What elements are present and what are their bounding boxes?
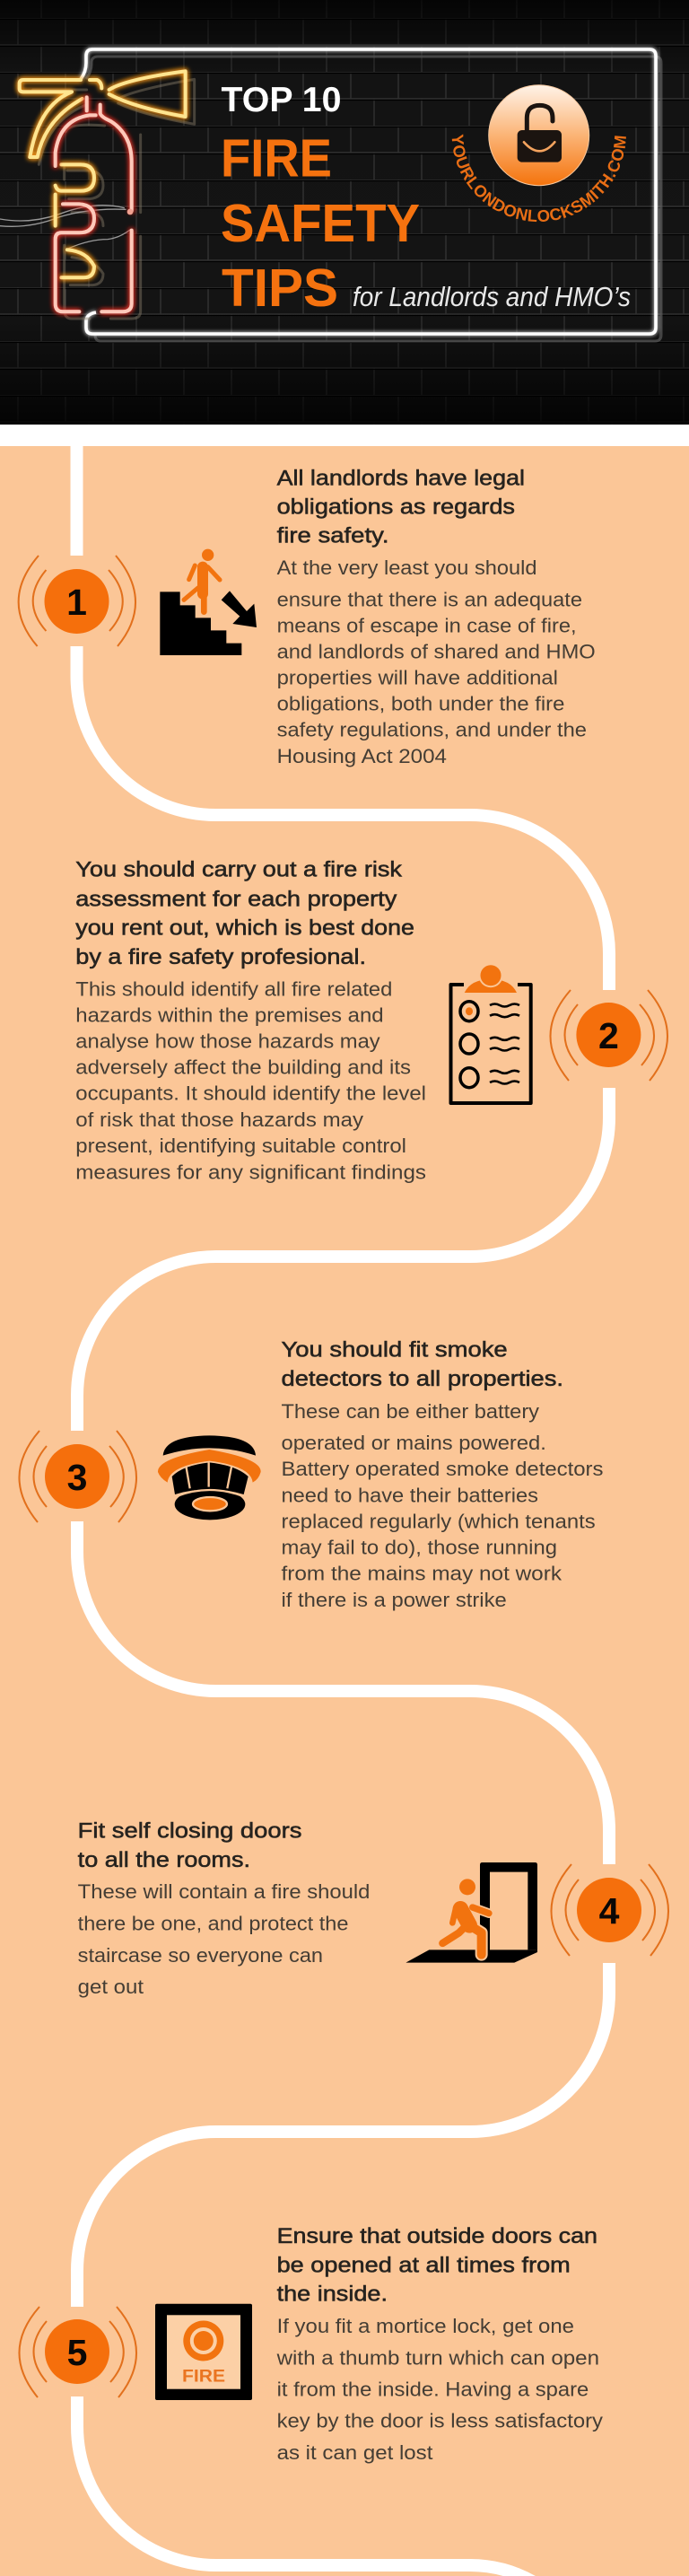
tip 2 heading: You should carry out a fire risk bbox=[75, 858, 403, 882]
tip 1 body: Housing Act 2004 bbox=[277, 745, 447, 767]
tip 3 bbox=[19, 1338, 603, 1611]
tip 3 heading: detectors to all properties. bbox=[282, 1367, 563, 1391]
number badge 4 bbox=[551, 1864, 668, 1963]
icon: checklist clipboard bbox=[450, 963, 531, 1103]
tip 2 body: This should identify all fire related bbox=[75, 977, 392, 1000]
tip 2 body: analyse how those hazards may bbox=[75, 1030, 380, 1052]
number badge 4: 4 bbox=[599, 1890, 620, 1932]
tip 3 body: from the mains may not work bbox=[282, 1563, 563, 1585]
subtitle: for Landlords and HMO’s bbox=[353, 281, 631, 312]
number badge 2 bbox=[550, 990, 667, 1088]
white band under header bbox=[0, 425, 689, 446]
tip 1 body: obligations, both under the fire bbox=[277, 693, 564, 715]
number badge 2: 2 bbox=[598, 1015, 619, 1056]
tip 2 body: of risk that those hazards may bbox=[75, 1108, 364, 1131]
icon: smoke detector bbox=[158, 1435, 261, 1520]
tip 5 body bbox=[276, 2315, 604, 2464]
tip 5 bbox=[19, 2224, 604, 2464]
icon: person leaving door bbox=[406, 1862, 537, 1963]
icon: smiling padlock bbox=[518, 105, 562, 162]
tip 1 body: ensure that there is an adequate bbox=[277, 588, 582, 610]
logo: yourlondonlocksmith bbox=[452, 84, 626, 223]
tip 3 body bbox=[282, 1400, 603, 1611]
tip 2 body: present, identifying suitable control bbox=[75, 1135, 406, 1157]
tip 5 heading: be opened at all times from bbox=[277, 2253, 571, 2277]
tip 3 body: These can be either battery bbox=[282, 1400, 540, 1423]
tip 3 heading bbox=[282, 1338, 563, 1391]
tip 4 bbox=[78, 1818, 668, 1998]
title: top 10: TOP 10 bbox=[221, 81, 341, 119]
tip 4 heading bbox=[78, 1818, 301, 1872]
title: safety: SAFETY bbox=[221, 194, 420, 253]
tip 2 body bbox=[75, 977, 426, 1183]
tip 5 body: If you fit a mortice lock, get one bbox=[277, 2315, 574, 2337]
tip 3 body: operated or mains powered. bbox=[282, 1432, 546, 1454]
header panel: neon brick wall bbox=[0, 0, 689, 425]
tip 2 body: adversely affect the building and its bbox=[75, 1056, 411, 1079]
title: tips: TIPS bbox=[222, 258, 338, 318]
tip 3 body: may fail to do), those running bbox=[282, 1537, 557, 1559]
tip 1 body: properties will have additional bbox=[277, 667, 558, 689]
white winding path bbox=[77, 431, 609, 2576]
tip 5 heading bbox=[277, 2224, 597, 2306]
tip 1 heading: obligations as regards bbox=[277, 495, 515, 520]
tip 1 heading: All landlords have legal bbox=[277, 467, 525, 491]
title: fire: FIRE bbox=[221, 129, 332, 188]
tip 4 body: staircase so everyone can bbox=[78, 1944, 323, 1967]
tip 2 bbox=[75, 858, 667, 1183]
number badge 3 bbox=[19, 1431, 136, 1522]
tip 4 body: get out bbox=[78, 1976, 144, 1998]
number badge 1 bbox=[19, 556, 135, 646]
tip 2 heading: by a fire safety profesional. bbox=[75, 945, 366, 969]
tip 5 heading: Ensure that outside doors can bbox=[277, 2224, 597, 2248]
tip 5 heading: the inside. bbox=[277, 2282, 388, 2306]
tip 5 body: with a thumb turn which can open bbox=[276, 2346, 599, 2369]
tip 2 body: measures for any significant findings bbox=[75, 1161, 426, 1183]
tip 4 body bbox=[78, 1880, 370, 1998]
tip 4 heading: Fit self closing doors bbox=[78, 1818, 301, 1843]
tip 1 body: safety regulations, and under the bbox=[277, 719, 587, 741]
tip 1 heading bbox=[277, 467, 525, 548]
tip 1 body: and landlords of shared and HMO bbox=[277, 640, 596, 662]
tip 3 body: replaced regularly (which tenants bbox=[282, 1510, 596, 1532]
tip 1 bbox=[19, 467, 596, 767]
tip 2 heading bbox=[75, 858, 414, 969]
tip 5 body: it from the inside. Having a spare bbox=[277, 2378, 589, 2400]
icon: fire call box bbox=[155, 2304, 252, 2400]
number badge 3: 3 bbox=[67, 1457, 87, 1498]
tip 3 heading: You should fit smoke bbox=[282, 1338, 508, 1362]
tip 3 body: if there is a power strike bbox=[282, 1589, 507, 1611]
tip 3 body: need to have their batteries bbox=[282, 1484, 538, 1506]
tip 2 heading: assessment for each property bbox=[75, 887, 397, 911]
icon: neon fire extinguisher bbox=[0, 71, 195, 319]
tip 3 body: Battery operated smoke detectors bbox=[282, 1458, 603, 1480]
tip 4 heading: to all the rooms. bbox=[78, 1848, 250, 1872]
tip 2 body: occupants. It should identify the level bbox=[75, 1082, 426, 1105]
tip 1 body bbox=[277, 556, 596, 767]
tip 4 body: there be one, and protect the bbox=[78, 1913, 348, 1935]
tip 1 body: means of escape in case of fire, bbox=[277, 614, 577, 636]
tip 1 heading: fire safety. bbox=[277, 524, 389, 548]
tip 5 body: as it can get lost bbox=[277, 2441, 433, 2464]
logo curved text: YOURLONDONLOCKSMITH.COM bbox=[452, 134, 626, 223]
number badge 5: 5 bbox=[67, 2332, 87, 2373]
tip 2 heading: you rent out, which is best done bbox=[75, 916, 414, 941]
tip 4 body: These will contain a fire should bbox=[78, 1880, 370, 1903]
tip 1 body: At the very least you should bbox=[277, 556, 536, 579]
tip 2 body: hazards within the premises and bbox=[75, 1003, 384, 1026]
neon frame bbox=[81, 49, 661, 341]
icon: stairs escape bbox=[160, 549, 257, 655]
icon: fire call box: FIRE bbox=[182, 2367, 225, 2386]
number badge 1: 1 bbox=[66, 582, 87, 623]
tip 5 body: key by the door is less satisfactory bbox=[277, 2410, 604, 2432]
number badge 5 bbox=[19, 2307, 136, 2397]
